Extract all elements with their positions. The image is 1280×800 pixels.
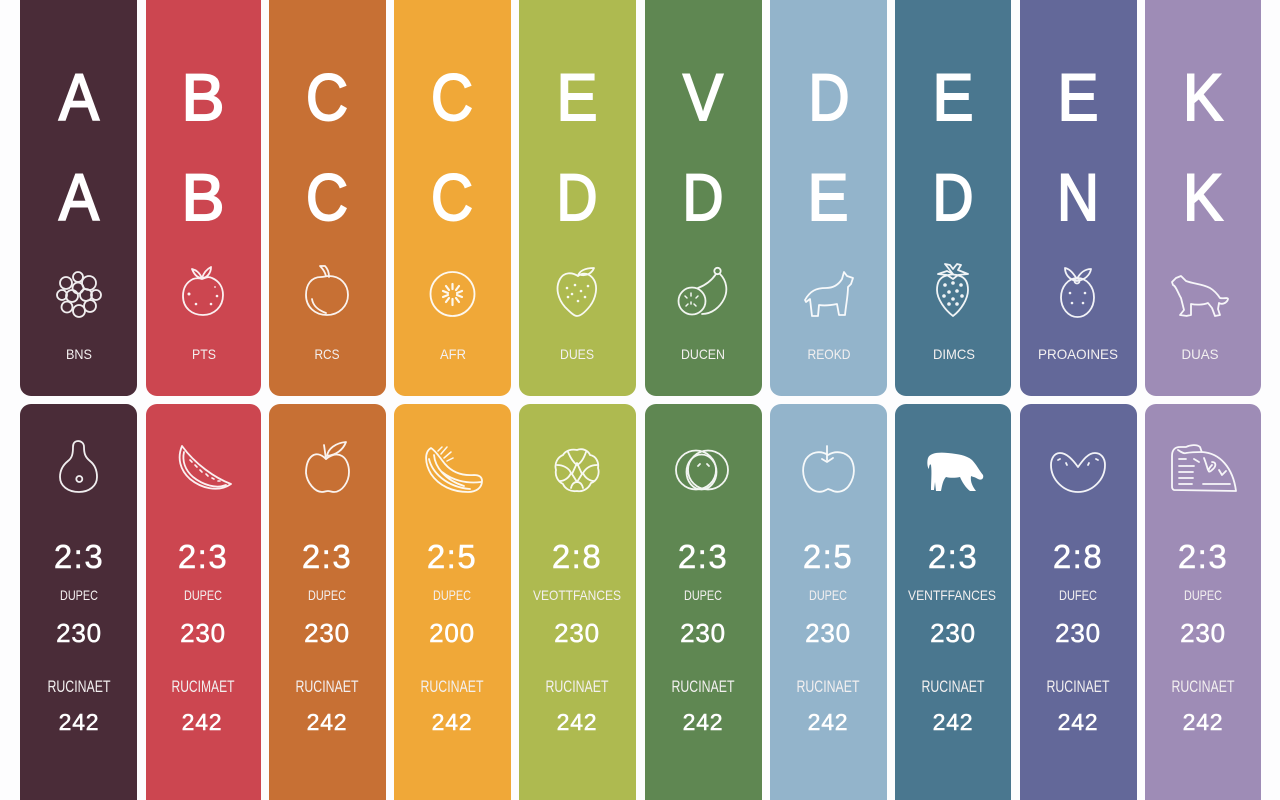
icon: banana peel [426, 447, 482, 492]
food label: PTS [192, 346, 216, 362]
vitamin letter K second: K [1183, 160, 1223, 234]
amount value: 242 [683, 709, 723, 735]
vitamin letter C second: C [306, 160, 348, 234]
measure label: RUCINAET [922, 677, 984, 696]
ratio value: 2:8 [1053, 538, 1103, 575]
measure label: DUPEC [184, 587, 222, 603]
icon: citrus slice [430, 272, 474, 316]
amount value: 200 [429, 618, 475, 648]
icon: berries [57, 272, 101, 317]
vitamin letter V: V [683, 60, 723, 134]
icon: animal [805, 272, 853, 316]
icon: dog [1172, 276, 1228, 316]
column 6 bottom panel [645, 404, 762, 800]
measure label: RUCINAET [296, 677, 358, 696]
ratio value: 2:3 [928, 538, 978, 575]
measure label: DUFEC [1059, 587, 1097, 603]
column 2 top panel [146, 0, 261, 396]
column 5 bottom panel [519, 404, 636, 800]
amount value: 230 [304, 618, 350, 648]
column 3 bottom panel [269, 404, 386, 800]
amount value: 242 [933, 709, 973, 735]
icon: fruit with leaves [1061, 268, 1094, 317]
measure label: RUCINAET [48, 677, 110, 696]
amount value: 242 [182, 709, 222, 735]
column 8 top panel [895, 0, 1011, 396]
column 9 bottom panel [1020, 404, 1137, 800]
amount value: 242 [432, 709, 472, 735]
column 6 top panel [645, 0, 762, 396]
measure label: DUPEC [1184, 587, 1222, 603]
icon: flower fruit [555, 449, 599, 491]
column 10 top panel [1145, 0, 1261, 396]
column 4 top panel [394, 0, 511, 396]
measure label: RUCINAET [672, 677, 734, 696]
ratio value: 2:3 [678, 538, 728, 575]
measure label: DUPEC [809, 587, 847, 603]
column 8 bottom panel [895, 404, 1011, 800]
measure label: DUPEC [433, 587, 471, 603]
measure label: DUPEC [308, 587, 346, 603]
measure label: RUCINAET [546, 677, 608, 696]
vitamin letter E: E [808, 160, 848, 234]
vitamin letter D: D [556, 160, 598, 234]
icon: bean [1051, 453, 1105, 492]
column 1 top panel [20, 0, 137, 396]
icon: apple outline [803, 446, 854, 492]
amount value: 230 [805, 618, 851, 648]
measure label: RUCINAET [1046, 677, 1110, 696]
icon: strawberry [558, 268, 596, 316]
column 4 bottom panel [394, 404, 511, 800]
icon: strawberry with seeds [937, 264, 968, 316]
amount value: 242 [1058, 709, 1098, 735]
ratio value: 2:3 [54, 538, 104, 575]
amount value: 242 [59, 709, 99, 735]
vitamin letter K: K [1183, 60, 1223, 134]
amount value: 230 [930, 618, 976, 648]
amount value: 230 [554, 618, 600, 648]
measure label: RUCINAET [420, 677, 484, 696]
icon: watermelon slice [180, 446, 231, 489]
food label: PROAOINES [1038, 346, 1118, 362]
amount value: 242 [808, 709, 848, 735]
measure label: RUCIMAET [172, 677, 234, 696]
food label: DUAS [1182, 346, 1218, 362]
column 2 bottom panel [146, 404, 261, 800]
vitamin letter D: D [932, 160, 974, 234]
icon: pear [60, 441, 97, 492]
icon: food label card [1172, 445, 1236, 491]
measure label: VENTFFANCES [908, 587, 996, 603]
vitamin letter B second: B [182, 160, 224, 234]
amount value: 242 [557, 709, 597, 735]
icon: cucumber [678, 268, 726, 314]
ratio value: 2:8 [552, 538, 602, 575]
column 3 top panel [269, 0, 386, 396]
measure label: VEOTTFANCES [533, 587, 621, 603]
vitamin letter E: E [932, 60, 974, 134]
amount value: 230 [680, 618, 726, 648]
food label: DUES [560, 346, 594, 362]
vitamin letter C second: C [431, 160, 473, 234]
amount value: 230 [56, 618, 102, 648]
icon: apple [306, 266, 348, 315]
ratio value: 2:3 [302, 538, 352, 575]
vitamin letter B: B [182, 60, 224, 134]
column 7 bottom panel [770, 404, 887, 800]
vitamin letter A: A [59, 60, 99, 134]
ratio value: 2:3 [1178, 538, 1228, 575]
column 10 bottom panel [1145, 404, 1261, 800]
column 5 top panel [519, 0, 636, 396]
vitamin letter D: D [682, 160, 724, 234]
amount value: 230 [180, 618, 226, 648]
amount value: 230 [1055, 618, 1101, 648]
icon: solid cow [927, 453, 983, 491]
food label: RCS [314, 346, 340, 362]
column 1 bottom panel [20, 404, 137, 800]
vitamin letter E: E [1058, 60, 1098, 134]
icon: tomato [183, 267, 223, 315]
food label: DIMCS [933, 346, 975, 362]
column 7 top panel [770, 0, 887, 396]
amount value: 242 [307, 709, 347, 735]
food label: REOKD [808, 346, 850, 362]
ratio value: 2:3 [178, 538, 228, 575]
vitamin letter C: C [431, 60, 473, 134]
amount value: 230 [1180, 618, 1226, 648]
food label: DUCEN [681, 346, 725, 362]
food label: AFR [440, 346, 466, 362]
column 9 top panel [1020, 0, 1137, 396]
measure label: DUPEC [684, 587, 722, 603]
measure label: DUPEC [60, 587, 98, 603]
food label: BNS [66, 346, 92, 362]
vitamin letter C: C [306, 60, 348, 134]
measure label: RUCINAET [1172, 677, 1234, 696]
ratio value: 2:5 [427, 538, 477, 575]
measure label: RUCINAET [796, 677, 860, 696]
amount value: 242 [1183, 709, 1223, 735]
vitamin letter N: N [1057, 160, 1099, 234]
vitamin letter D: D [808, 60, 850, 134]
icon: apple with leaf [306, 442, 349, 492]
icon: overlapping rings [676, 450, 728, 490]
vitamin letter A second: A [59, 160, 99, 234]
ratio value: 2:5 [803, 538, 853, 575]
vitamin letter E: E [556, 60, 598, 134]
